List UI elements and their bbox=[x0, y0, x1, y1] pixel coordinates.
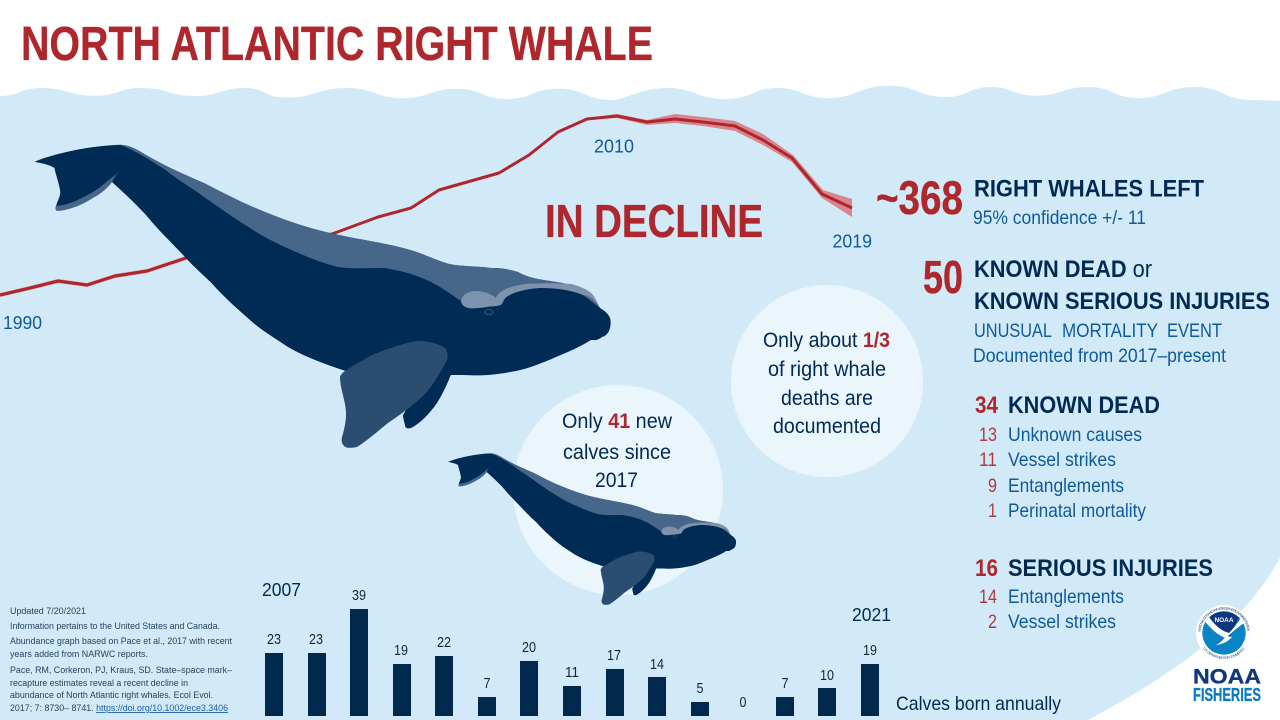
footnotes and citation: Abundance graph based on Pace et al., 2017 with recent bbox=[10, 636, 233, 646]
stat: whales left bbox=[876, 171, 1204, 229]
chart start year: 2007 bbox=[262, 579, 301, 600]
NOAA Fisheries logo: NOAA bbox=[1214, 617, 1234, 624]
list: known dead breakdown bbox=[975, 392, 1160, 522]
bar chart: calves born annually: 0 bbox=[740, 695, 746, 711]
bar chart: calves born annually: 5 bbox=[696, 681, 704, 697]
callout circle: one third of deaths: Only about 1/3 bbox=[763, 329, 890, 352]
callout circle: one third of deaths: of right whale bbox=[768, 358, 886, 381]
chart end year: 2021 bbox=[852, 604, 891, 625]
bar chart: calves born annually: 19 bbox=[863, 643, 877, 659]
bar chart: calves born annually: 22 bbox=[437, 635, 451, 651]
NOAA Fisheries logo: U.S. DEPARTMENT OF COMMERCE bbox=[1203, 647, 1244, 659]
list: known dead breakdown: Perinatal mortality bbox=[1008, 500, 1146, 522]
footnotes and citation: abundance of North Atlantic right whales. Ecol Evol. bbox=[10, 690, 213, 700]
unusual mortality event label: EVENT bbox=[1167, 320, 1222, 342]
bar chart: calves born annually: 10 bbox=[820, 668, 834, 684]
callout circle: one third of deaths: deaths are bbox=[781, 387, 873, 410]
bar chart: calves born annually: 7 bbox=[782, 676, 788, 692]
bar chart: calves born annually: 17 bbox=[607, 648, 621, 664]
footnotes and citation: Updated 7/20/2021 bbox=[10, 606, 86, 616]
list: serious injuries breakdown: SERIOUS INJURIES bbox=[1008, 555, 1213, 582]
documented dates: Documented from 2017–present bbox=[973, 345, 1227, 367]
bar chart: calves born annually: 14 bbox=[650, 657, 664, 673]
bar chart: calves born annually: 11 bbox=[565, 665, 579, 681]
bar chart: calves born annually: 39 bbox=[352, 588, 366, 604]
list: serious injuries breakdown: 16 bbox=[975, 555, 998, 582]
year label 1990: 1990 bbox=[3, 313, 42, 333]
stat: whales left: RIGHT WHALES LEFT bbox=[974, 176, 1204, 202]
list: serious injuries breakdown: 2 bbox=[988, 611, 997, 633]
abundance trend line chart bbox=[0, 114, 872, 333]
bar chart: calves born annually: 23 bbox=[267, 632, 281, 648]
list: known dead breakdown: Vessel strikes bbox=[1008, 449, 1116, 471]
unusual mortality event label bbox=[974, 320, 1222, 342]
footnotes and citation bbox=[10, 606, 233, 713]
list: serious injuries breakdown: 14 bbox=[979, 586, 997, 608]
list: known dead breakdown: 9 bbox=[988, 475, 997, 497]
callout circle: one third of deaths: documented bbox=[773, 415, 881, 438]
footnotes and citation: recapture estimates reveal a recent decline in bbox=[10, 678, 188, 688]
stat: whales left: 95% confidence +/- 11 bbox=[973, 208, 1146, 229]
list: known dead breakdown: 34 bbox=[975, 392, 998, 419]
list: serious injuries breakdown bbox=[975, 555, 1213, 633]
footnotes and citation: Information pertains to the United States and Canada. bbox=[10, 621, 220, 631]
list: serious injuries breakdown: Vessel strikes bbox=[1008, 611, 1116, 633]
heading: in decline: IN DECLINE bbox=[545, 195, 763, 247]
year label 2010: 2010 bbox=[594, 136, 634, 156]
footnotes and citation: Pace, RM, Corkeron, PJ, Kraus, SD. State–space mark– bbox=[10, 665, 232, 675]
callout circle: new calves: calves since bbox=[563, 441, 671, 464]
bar chart: calves born annually bbox=[262, 579, 1061, 716]
footnotes and citation: 2017; 7: 8730– 8741. https://doi.org/10.1002/ece3.3406 bbox=[10, 703, 228, 713]
callout circle: new calves: 2017 bbox=[595, 469, 638, 492]
NOAA Fisheries logo: NOAA bbox=[1193, 664, 1261, 688]
bar chart: calves born annually: 23 bbox=[309, 632, 323, 648]
callout circle: new calves bbox=[513, 385, 723, 595]
list: known dead breakdown: 13 bbox=[979, 424, 997, 446]
list: known dead breakdown: Entanglements bbox=[1008, 475, 1124, 497]
bar chart: calves born annually: 19 bbox=[394, 643, 408, 659]
chart caption: Calves born annually bbox=[896, 693, 1061, 715]
unusual mortality event label: UNUSUAL bbox=[974, 320, 1052, 342]
NOAA Fisheries logo: NATIONAL OCEANIC AND ATMOSPHERIC ADMINISTRATION bbox=[1198, 607, 1250, 632]
stat: whales left: ~368 bbox=[876, 171, 963, 224]
year label 2019: 2019 bbox=[832, 232, 872, 252]
stat: known dead or serious injuries bbox=[923, 251, 1270, 367]
list: known dead breakdown: 11 bbox=[979, 449, 997, 471]
footnotes and citation: years added from NARWC reports. bbox=[10, 649, 148, 659]
list: known dead breakdown: Unknown causes bbox=[1008, 424, 1142, 446]
adult whale illustration bbox=[34, 145, 611, 448]
calf whale illustration bbox=[448, 453, 736, 605]
unusual mortality event label: MORTALITY bbox=[1062, 320, 1158, 342]
bar chart: calves born annually: 20 bbox=[522, 640, 536, 656]
bar chart: calves born annually: 7 bbox=[484, 676, 490, 692]
callout circle: new calves: Only 41 new bbox=[562, 410, 673, 433]
stat: known dead or serious injuries: 50 bbox=[923, 251, 963, 303]
list: serious injuries breakdown: Entanglements bbox=[1008, 586, 1124, 608]
callout circle: one third of deaths bbox=[731, 285, 923, 477]
list: known dead breakdown: KNOWN DEAD bbox=[1008, 392, 1160, 419]
title: NORTH ATLANTIC RIGHT WHALE bbox=[21, 18, 653, 71]
stat: known dead or serious injuries: KNOWN DEAD or bbox=[974, 256, 1152, 283]
list: known dead breakdown: 1 bbox=[988, 500, 997, 522]
NOAA Fisheries logo bbox=[1193, 605, 1261, 705]
